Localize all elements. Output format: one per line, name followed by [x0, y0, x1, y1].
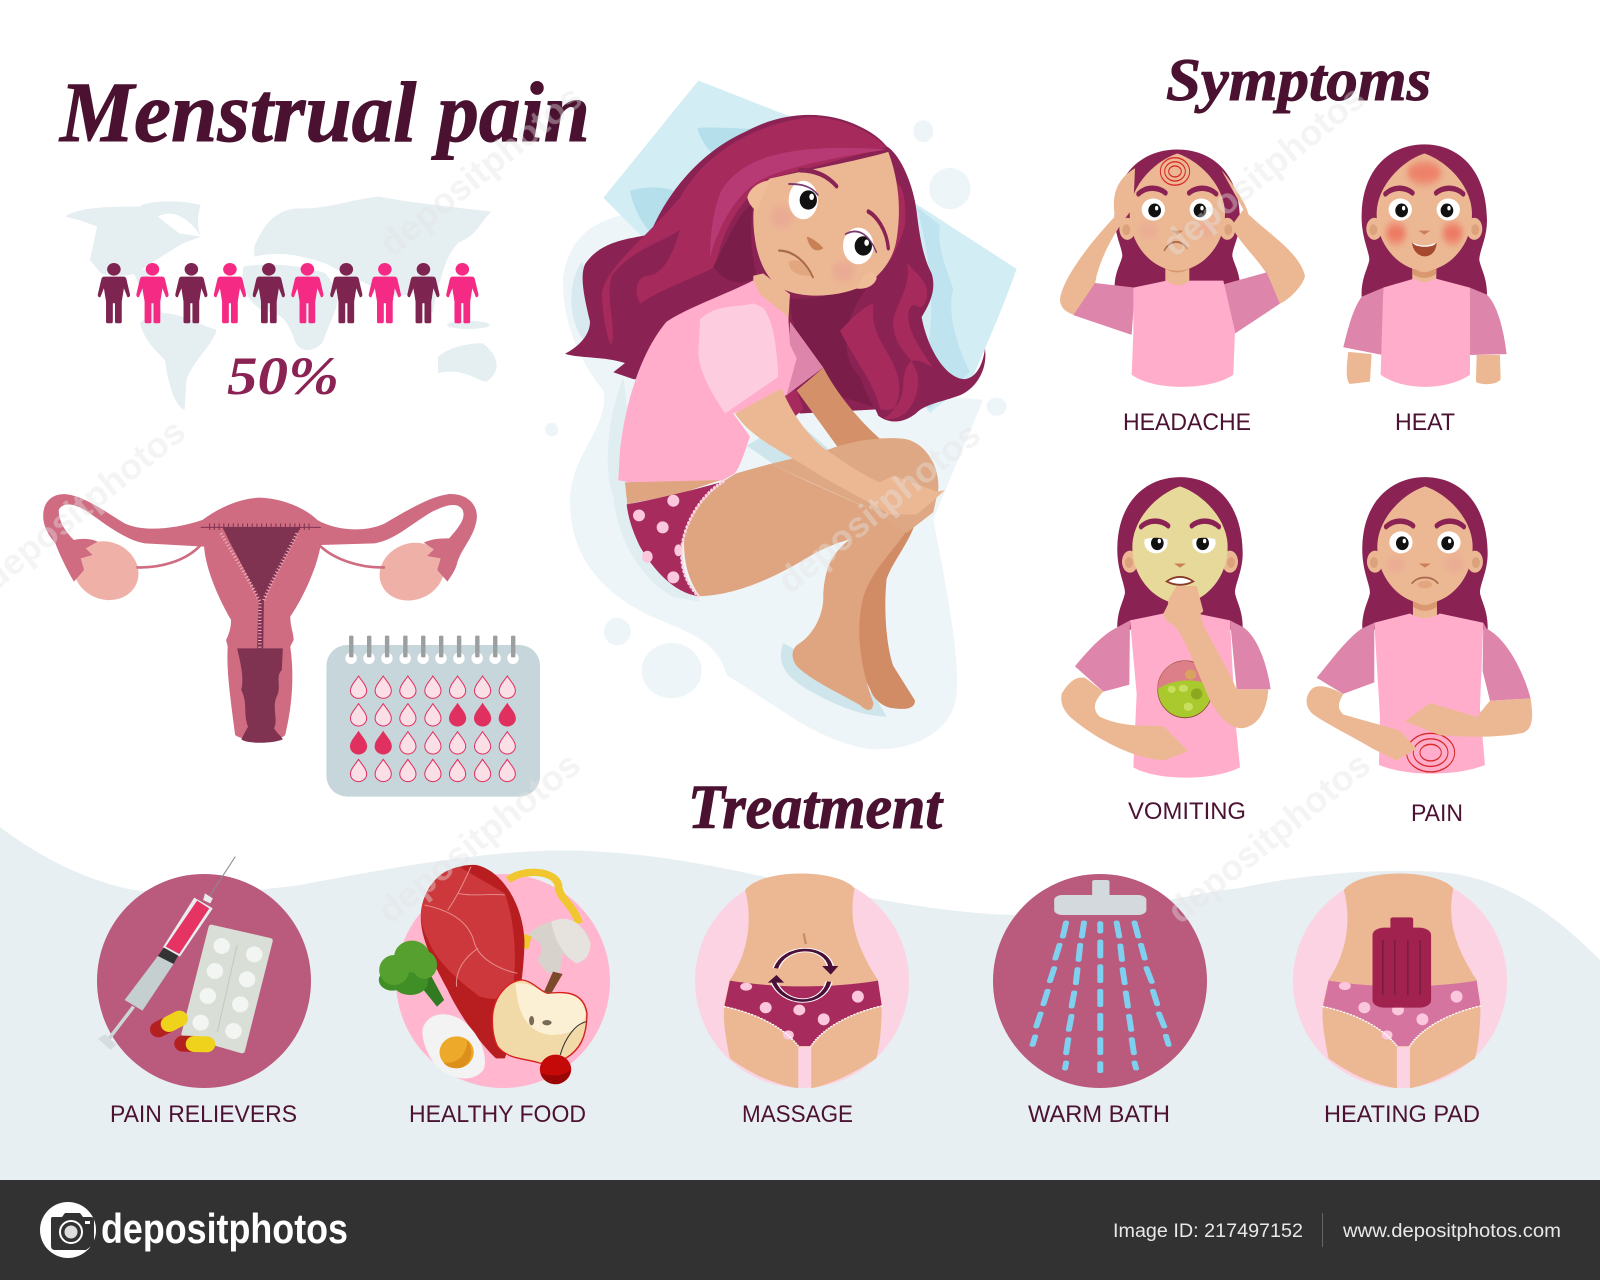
footer bar — [0, 1180, 1600, 1280]
far arm — [797, 368, 880, 450]
symptom: headache — [1060, 150, 1305, 387]
symptom: heat — [1343, 144, 1507, 387]
symptom: vomiting — [1061, 477, 1271, 778]
label: healthy food: HEALTHY FOOD — [409, 1101, 586, 1128]
hot water bottle — [1373, 917, 1431, 1008]
t-shirt — [618, 280, 823, 485]
treatment: pain relievers — [97, 857, 311, 1088]
near arm hugging knees — [735, 388, 945, 515]
face — [747, 152, 899, 296]
stock watermarks: depositphotos — [769, 413, 988, 601]
treatment: healthy food — [379, 865, 610, 1088]
label: pain relievers: PAIN RELIEVERS — [110, 1101, 297, 1128]
statistic: 50%: 50% — [227, 346, 339, 406]
shirt with sleeves — [1075, 614, 1271, 778]
label: heating pad: HEATING PAD — [1324, 1101, 1480, 1128]
illustration: uterus — [43, 494, 477, 743]
knee — [770, 438, 938, 533]
label: vomiting: VOMITING — [1128, 798, 1246, 825]
world map — [65, 197, 497, 410]
people pictogram row — [98, 263, 478, 323]
squiggle and mushroom — [508, 872, 591, 973]
polka dot underwear — [627, 481, 723, 596]
shower head — [1054, 880, 1146, 915]
illustration: girl curled up on pillow — [545, 81, 1017, 749]
water streams — [1032, 922, 1169, 1071]
neck — [753, 273, 790, 322]
shirt with sleeves — [1317, 614, 1531, 774]
hand at chin — [1168, 586, 1203, 625]
circular massage arrows — [768, 950, 838, 1001]
underwear — [724, 981, 882, 1046]
label: massage: MASSAGE — [742, 1101, 853, 1128]
footer logo icon — [40, 1202, 96, 1258]
panel: world statistic — [65, 197, 497, 410]
label: pain: PAIN — [1411, 800, 1463, 827]
flushed face — [1366, 154, 1482, 271]
stomach icon — [1158, 661, 1212, 718]
calendar drop grid — [350, 676, 515, 782]
broccoli — [379, 941, 444, 1007]
meat — [421, 865, 524, 1058]
shirt with sleeves — [1343, 278, 1507, 387]
near shin and foot — [793, 519, 913, 710]
pillow — [571, 81, 1017, 717]
apple half — [492, 972, 587, 1084]
calendar binding rings — [345, 636, 519, 664]
underwear — [1323, 981, 1480, 1046]
sad face — [1367, 486, 1483, 603]
label: headache: HEADACHE — [1123, 409, 1251, 436]
label: warm bath: WARM BATH — [1028, 1101, 1170, 1128]
hair — [565, 115, 985, 421]
illustration: calendar with drops — [326, 636, 540, 797]
pain rings — [1407, 733, 1455, 772]
heading: Symptoms: Symptoms — [1166, 47, 1431, 113]
treatment: heating pad — [1293, 874, 1507, 1088]
shirt with sleeves — [1073, 272, 1280, 387]
treatment: warm bath — [993, 874, 1207, 1088]
arms on belly — [1307, 686, 1532, 760]
headache face — [1119, 154, 1235, 271]
heading: Treatment: Treatment — [688, 774, 944, 842]
footer image id: Image ID: 217497152 — [1113, 1221, 1303, 1242]
egg — [422, 1014, 485, 1078]
stock watermarks — [0, 76, 1378, 931]
label: heat: HEAT — [1395, 409, 1455, 436]
syringe — [98, 857, 235, 1050]
raised arms — [1060, 168, 1305, 315]
stock watermarks: depositphotos — [371, 76, 590, 264]
stock watermarks: depositphotos — [1154, 76, 1373, 264]
background wave band — [0, 827, 1600, 1180]
blister pack — [184, 927, 270, 1051]
far leg — [856, 515, 917, 709]
title: Menstrual pain: Menstrual pain — [58, 64, 590, 160]
waist — [625, 480, 720, 504]
stock watermarks: depositphotos — [369, 743, 588, 931]
arms — [1061, 586, 1268, 760]
capsules — [159, 1019, 207, 1044]
stock watermarks: depositphotos — [1159, 743, 1378, 931]
footer website: www.depositphotos.com — [1342, 1221, 1561, 1242]
treatment: massage — [695, 874, 909, 1088]
thigh — [684, 464, 915, 596]
footer brand name: depositphotos — [101, 1205, 348, 1252]
symptom: abdominal pain — [1307, 477, 1532, 774]
nauseous face — [1122, 486, 1238, 603]
